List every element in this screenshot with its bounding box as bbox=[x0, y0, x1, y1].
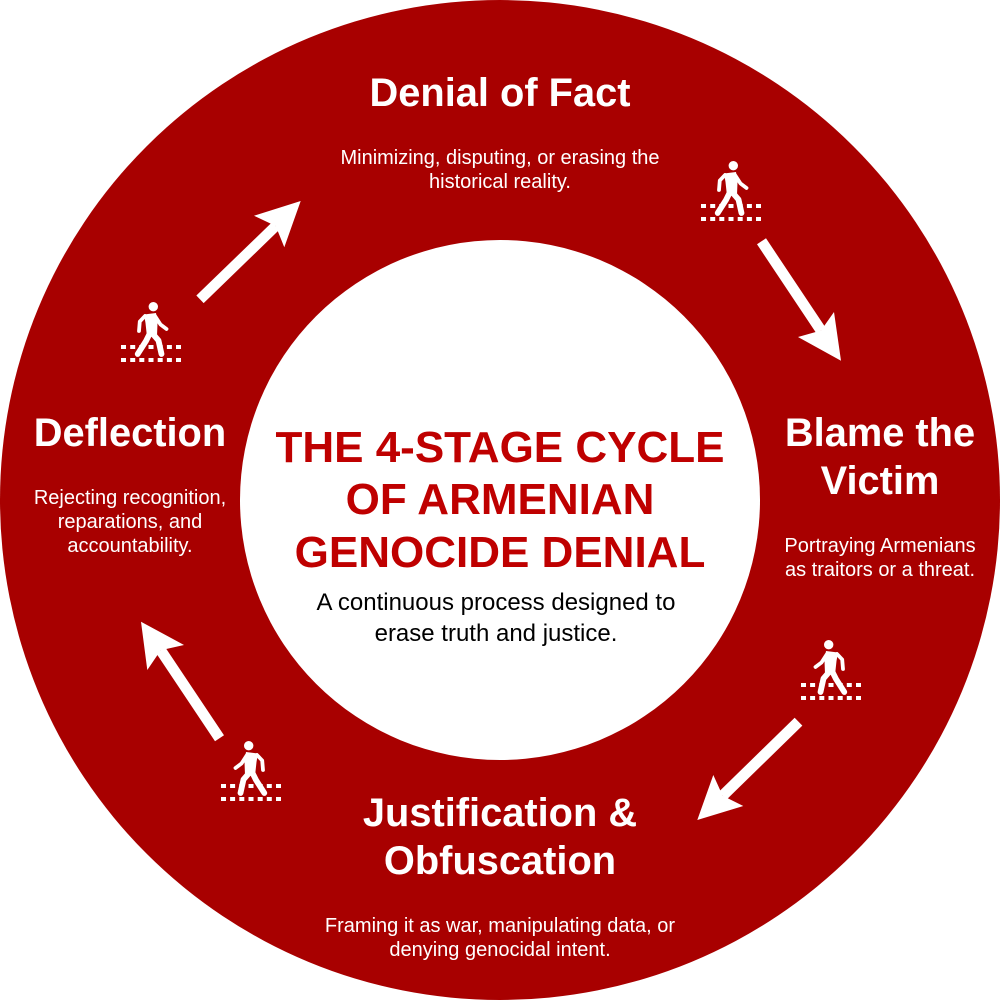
stage: justification and obfuscation: Obfuscation bbox=[384, 839, 616, 883]
stage: denial of fact: historical reality. bbox=[429, 171, 571, 193]
arrow: denial to blame bbox=[762, 241, 841, 361]
stage: deflection: Deflection bbox=[34, 411, 226, 455]
subtitle bbox=[317, 589, 675, 647]
subtitle: A continuous process designed to bbox=[317, 589, 675, 616]
stage: deflection: Rejecting recognition, bbox=[34, 487, 226, 509]
stage: blame the victim: Blame the bbox=[785, 411, 975, 455]
center circle bbox=[240, 240, 760, 760]
icon: walker upper left bbox=[121, 302, 181, 362]
stage: deflection: reparations, and bbox=[58, 511, 202, 533]
stage: denial of fact: Denial of Fact bbox=[370, 71, 630, 115]
stage: justification and obfuscation: Justification & bbox=[363, 791, 637, 835]
stage: blame the victim: Portraying Armenians bbox=[784, 535, 976, 557]
arrow: blame to justification bbox=[697, 722, 798, 820]
icon: walker top right bbox=[701, 161, 761, 221]
stage: denial of fact: Minimizing, disputing, or erasing the bbox=[340, 147, 660, 169]
stage: denial of fact bbox=[340, 71, 660, 193]
title: OF ARMENIAN bbox=[346, 475, 654, 524]
stage: deflection bbox=[34, 411, 226, 557]
stage: deflection: accountability. bbox=[67, 535, 193, 557]
icon: walker lower left bbox=[221, 741, 281, 801]
title: THE 4-STAGE CYCLE bbox=[275, 423, 725, 472]
subtitle: erase truth and justice. bbox=[375, 620, 617, 647]
icon: walker right bbox=[801, 640, 861, 700]
title: GENOCIDE DENIAL bbox=[295, 528, 705, 577]
stage: blame the victim bbox=[784, 411, 976, 581]
arrow: deflection to denial bbox=[200, 201, 301, 299]
stage: justification and obfuscation bbox=[325, 791, 675, 961]
title bbox=[275, 423, 725, 577]
stage: justification and obfuscation: Framing it as war, manipulating data, or bbox=[325, 915, 675, 937]
stage: blame the victim: as traitors or a threat. bbox=[785, 559, 975, 581]
stage: justification and obfuscation: denying genocidal intent. bbox=[389, 939, 611, 961]
stage: blame the victim: Victim bbox=[821, 459, 939, 503]
arrow: justification to deflection bbox=[141, 622, 220, 738]
